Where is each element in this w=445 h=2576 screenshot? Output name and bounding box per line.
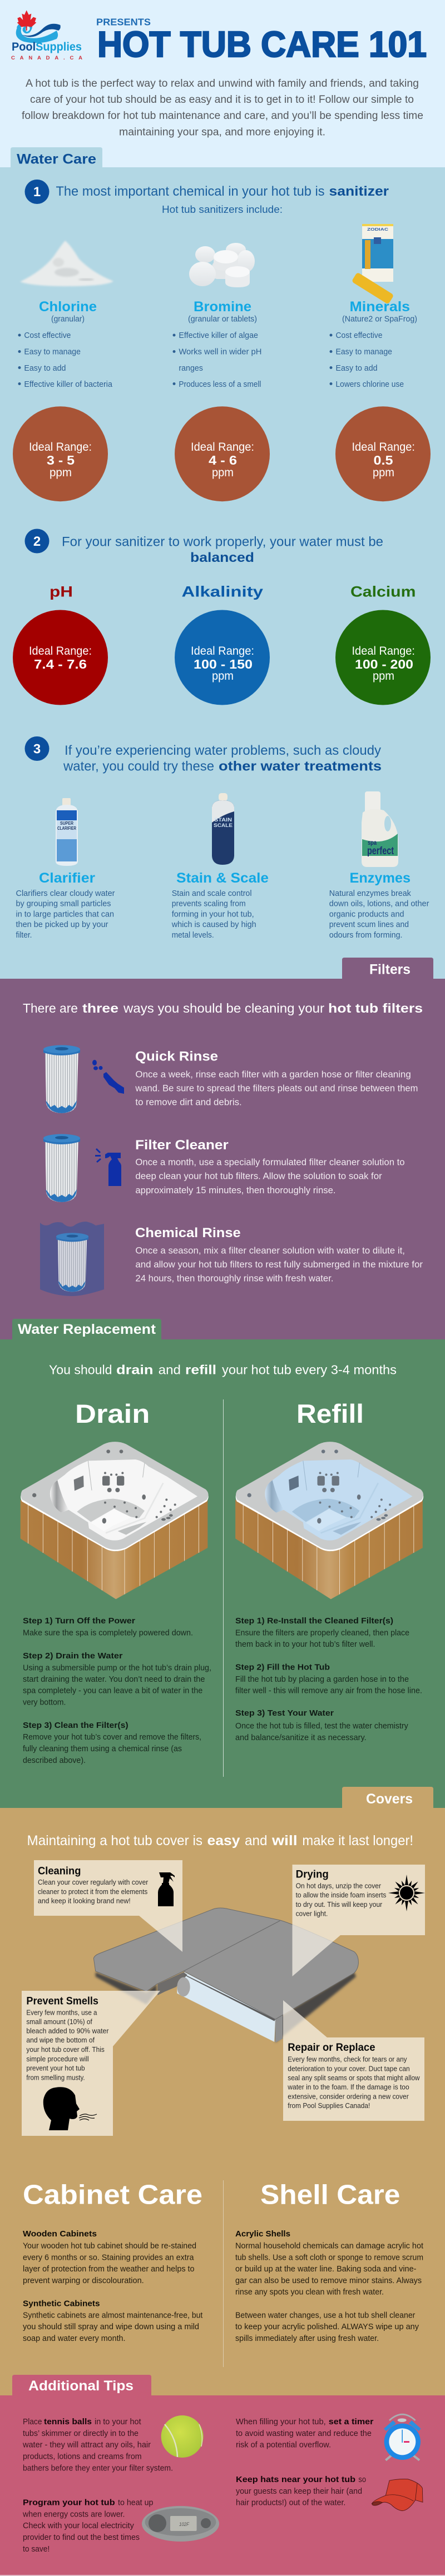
callout: drying: On hot days, unzip the cover bbox=[296, 1881, 382, 1890]
tip: keep hats: your guests can keep their hair (and bbox=[236, 2487, 362, 2496]
callout: drying: Drying bbox=[296, 1869, 329, 1880]
icon: minerals box and cartridge: ZODIAC bbox=[367, 228, 388, 232]
icon: spa control panel: 102F bbox=[179, 2522, 189, 2527]
intro text: A hot tub is the perfect way to relax and unwind with family and friends, and taking bbox=[26, 78, 419, 89]
water replacement heading: drain bbox=[116, 1363, 154, 1377]
range circle: bromine bbox=[175, 406, 270, 501]
refill heading: Refill bbox=[296, 1399, 364, 1428]
intro text: care of your hot tub should be as easy and it is to get in to it! Follow our simple to bbox=[30, 94, 414, 106]
shell care column: rinse any spots you clean with fresh water. bbox=[235, 2288, 384, 2297]
range circle: calcium: 100 - 200 bbox=[355, 657, 413, 671]
refill steps: them back in to your hot tub’s filter well. bbox=[235, 1640, 375, 1649]
tip: program your hot tub: when energy costs are lower. bbox=[22, 2509, 125, 2519]
tab: water replacement bbox=[12, 1319, 161, 1339]
tab: additional tips bbox=[12, 2375, 151, 2395]
step 2 badge: 2 bbox=[33, 534, 41, 549]
icon: minerals box and cartridge bbox=[352, 224, 394, 305]
range circle: alkalinity: Ideal Range: bbox=[191, 645, 254, 657]
sanitizer column: bromine: Bromine bbox=[194, 299, 251, 315]
drain steps: Step 1) Turn Off the Power bbox=[23, 1616, 135, 1626]
tip: set a timer: When filling your hot tub, bbox=[236, 2417, 326, 2426]
callout: drying bbox=[293, 1865, 425, 1976]
icon: red cap bbox=[372, 2479, 423, 2511]
panel: water care bbox=[0, 147, 445, 979]
icon: enzymes bottle bbox=[362, 791, 398, 867]
range circle: chlorine: Ideal Range: bbox=[29, 441, 92, 454]
sanitizers subheading: Hot tub sanitizers include: bbox=[162, 204, 283, 215]
icon: enzymes bottle: spa bbox=[368, 839, 377, 846]
tip: tennis balls: water - they will attract any oils, hair bbox=[22, 2440, 151, 2450]
sanitizer column: chlorine: Easy to manage bbox=[24, 348, 81, 357]
treatment column: clarifier bbox=[16, 870, 115, 940]
icon: black spray bottle bbox=[158, 1872, 175, 1906]
tip: program your hot tub: Check with your local electricity bbox=[23, 2521, 134, 2530]
water replacement heading: your hot tub every 3-4 months bbox=[222, 1363, 397, 1377]
chemical rinse text: 24 hours, then thoroughly rinse with fresh water. bbox=[135, 1273, 334, 1283]
callout: prevent smells: your hot tub cover off. This bbox=[26, 2045, 105, 2054]
refill steps bbox=[235, 1616, 422, 1742]
step 1 heading: The most important chemical in your hot tub is bbox=[56, 184, 325, 199]
treatment column: stain and scale: forming in your hot tub, bbox=[172, 910, 254, 919]
shell care column: to keep your acrylic polished. ALWAYS wipe up any bbox=[235, 2323, 419, 2331]
chemical rinse text: Chemical Rinse bbox=[135, 1225, 241, 1240]
range circle: minerals: 0.5 bbox=[374, 453, 393, 467]
sanitizer column: chlorine: Effective killer of bacteria bbox=[24, 380, 113, 389]
drain steps: fully cleaning them using a chemical rinse (as bbox=[23, 1745, 182, 1753]
filters heading: three bbox=[82, 1001, 118, 1015]
covers heading: Maintaining a hot tub cover is bbox=[27, 1833, 202, 1848]
icon: clarifier bottle: CLARIFIER bbox=[57, 826, 76, 831]
tip: keep hats bbox=[236, 2475, 366, 2508]
cabinet care column: layer of protection from the weather and helps to bbox=[23, 2265, 195, 2274]
range circle: pH bbox=[13, 610, 108, 705]
callout: prevent smells: Every few months, use a bbox=[26, 2009, 97, 2017]
panel: water replacement bbox=[0, 1319, 445, 1808]
tab: water care bbox=[11, 147, 102, 167]
shell care column: Between water changes, use a hot tub shell cleaner bbox=[235, 2311, 416, 2320]
sanitizer column: bromine: ranges bbox=[179, 364, 203, 373]
callout: repair or replace bbox=[283, 2000, 424, 2121]
shell care column bbox=[235, 2180, 423, 2343]
tip: set a timer: set a timer bbox=[329, 2417, 374, 2426]
callout: repair or replace: from Pool Supplies Canada! bbox=[288, 2101, 370, 2110]
icon: bromine tablets bbox=[189, 243, 255, 287]
tip: keep hats: so bbox=[358, 2475, 366, 2484]
drain steps: spa completely - you can leave a bit of water in the bbox=[23, 1687, 202, 1696]
sanitizer column: minerals: (Nature2 or SpaFrog) bbox=[342, 315, 417, 323]
callout: repair or replace: water in to the foam. If the damage is too bbox=[287, 2083, 409, 2091]
callout: drying: to allow the inside foam inserts bbox=[296, 1891, 387, 1899]
callout: repair or replace: Every few months, check for tears or any bbox=[288, 2055, 407, 2063]
treatment column: stain and scale: Stain and scale control bbox=[172, 889, 251, 898]
treatment column: clarifier: then be picked up by your bbox=[16, 920, 108, 929]
range circle: alkalinity: 100 - 150 bbox=[194, 657, 253, 671]
tip: program your hot tub: to heat up bbox=[118, 2498, 154, 2508]
sanitizer column: minerals: Easy to manage bbox=[336, 348, 392, 357]
treatment column: clarifier: by grouping small particles bbox=[16, 899, 111, 908]
tip: program your hot tub: Program your hot tub bbox=[23, 2498, 115, 2508]
callout: cleaning: cleaner to protect it from the elements bbox=[38, 1887, 148, 1896]
drain steps: described above). bbox=[23, 1756, 86, 1765]
filter cleaner text: deep clean your hot tub filters. Allow the solution to soak for bbox=[135, 1172, 382, 1182]
icon: chlorine powder pile bbox=[20, 241, 113, 286]
filters heading: ways you should be cleaning your bbox=[123, 1001, 324, 1015]
cabinet care column: Synthetic Cabinets bbox=[23, 2299, 100, 2309]
sanitizer column: minerals: Cost effective bbox=[336, 331, 383, 340]
step 3 heading: water, you could try these bbox=[63, 759, 214, 774]
treatment column: stain and scale: Stain & Scale bbox=[176, 870, 269, 886]
icon: alarm clock bbox=[384, 2414, 421, 2460]
step 3 badge: 3 bbox=[33, 741, 41, 757]
water replacement heading: refill bbox=[185, 1363, 216, 1377]
shell care column: Normal household chemicals can damage acrylic hot bbox=[235, 2242, 423, 2251]
water replacement heading bbox=[49, 1363, 397, 1377]
covers heading bbox=[27, 1833, 413, 1848]
refill steps: Step 3) Test Your Water bbox=[235, 1708, 334, 1718]
filter cleaner text bbox=[135, 1138, 405, 1195]
tip: tennis balls: tubs’ skimmer or directly in to the bbox=[23, 2429, 139, 2438]
drain steps: Using a submersible pump or the hot tub’s drain plug, bbox=[23, 1663, 211, 1672]
icon: hose nozzle bbox=[92, 1060, 124, 1094]
treatment column: stain and scale: prevents scaling from bbox=[172, 899, 246, 908]
illustration: filled hot tub bbox=[235, 1442, 423, 1599]
range circle: minerals bbox=[335, 406, 431, 501]
range circle: chlorine: ppm bbox=[50, 466, 72, 479]
cabinet care column: Cabinet Care bbox=[23, 2180, 202, 2210]
icon: sun bbox=[388, 1875, 425, 1911]
step 3 heading: If you’re experiencing water problems, such as cloudy bbox=[65, 743, 381, 758]
callout: drying: cover light. bbox=[296, 1910, 328, 1918]
sanitizer column: bromine: Works well in wider pH bbox=[179, 348, 261, 357]
logo: Pool Supplies Canada bbox=[11, 10, 82, 61]
step 2 heading bbox=[62, 535, 383, 565]
sanitizer column: minerals: Minerals bbox=[349, 299, 410, 315]
panel: additional tips bbox=[0, 2375, 445, 2576]
filters heading: hot tub filters bbox=[328, 1001, 423, 1015]
sanitizer column: bromine: Produces less of a smell bbox=[179, 380, 261, 389]
drain steps: Remove your hot tub’s cover and remove the filters, bbox=[23, 1733, 201, 1742]
refill steps: Once the hot tub is filled, test the water chemistry bbox=[235, 1722, 408, 1731]
shell care column: Acrylic Shells bbox=[235, 2229, 290, 2239]
covers heading: easy bbox=[207, 1833, 240, 1848]
range circle: pH: Ideal Range: bbox=[29, 645, 92, 657]
tip: program your hot tub: provider to find out the best times bbox=[23, 2533, 140, 2542]
range circle: chlorine bbox=[13, 406, 108, 501]
range circle: calcium: Ideal Range: bbox=[352, 645, 415, 657]
range circle: calcium bbox=[335, 610, 431, 705]
tip: tennis balls: tennis balls bbox=[44, 2417, 92, 2426]
page background: header bbox=[0, 0, 445, 167]
range circle: calcium: ppm bbox=[373, 670, 394, 682]
step 1 heading: sanitizer bbox=[329, 184, 389, 199]
sanitizer column: bromine bbox=[172, 299, 261, 389]
range circle: alkalinity: ppm bbox=[212, 670, 234, 682]
tab: covers bbox=[342, 1787, 433, 1808]
tip: set a timer bbox=[236, 2417, 374, 2450]
intro text: follow breakdown for hot tub maintenance and care, and you’ll be spending less time bbox=[22, 110, 423, 122]
step 2 badge bbox=[24, 529, 49, 554]
treatment column: clarifier: filter. bbox=[16, 931, 32, 940]
cabinet care column: every 6 months or so. Staining provides an extra bbox=[23, 2253, 194, 2262]
range circle: bromine: Ideal Range: bbox=[191, 441, 254, 454]
sanitizer column: bromine: (granular or tablets) bbox=[188, 315, 257, 323]
sanitizer column: minerals: Easy to add bbox=[336, 364, 377, 373]
sanitizer column: bromine: Effective killer of algae bbox=[179, 331, 258, 340]
callout: repair or replace: seal any split seams or spots that might allow bbox=[288, 2074, 420, 2082]
cabinet care column: prevent warping or discolouration. bbox=[23, 2276, 144, 2285]
presents label: PRESENTS bbox=[96, 17, 151, 28]
step 1 badge: 1 bbox=[33, 185, 41, 200]
icon: stain and scale bottle: SCALE bbox=[214, 823, 233, 828]
tab: additional tips: Additional Tips bbox=[28, 2378, 134, 2394]
refill steps: Ensure the filters are properly cleaned, then place bbox=[235, 1628, 409, 1637]
treatment column: clarifier: Clarifiers clear cloudy water bbox=[16, 889, 115, 898]
tab: water replacement: Water Replacement bbox=[18, 1322, 156, 1337]
sanitizer column: minerals: Lowers chlorine use bbox=[336, 380, 404, 389]
illustration: empty hot tub bbox=[21, 1442, 209, 1599]
icon: spa control panel bbox=[142, 2506, 219, 2542]
callout: cleaning: and keep it looking brand new! bbox=[38, 1897, 131, 1905]
water replacement heading: You should bbox=[49, 1363, 112, 1377]
tip: set a timer: risk of a potential overflow. bbox=[236, 2440, 331, 2450]
step 2 heading: balanced bbox=[190, 550, 254, 565]
quick rinse text: wand. Be sure to spread the filters pleats out and rinse between them bbox=[135, 1084, 418, 1094]
shell care column: tub shells. Use a soft cloth or sponge to remove scrum bbox=[235, 2253, 423, 2262]
quick rinse text: to remove dirt and debris. bbox=[135, 1097, 242, 1107]
refill steps: filter well - this will remove any air from the hose line. bbox=[235, 1687, 422, 1696]
chemical rinse text bbox=[135, 1225, 423, 1283]
treatment column: enzymes: down oils, lotions, and other bbox=[329, 899, 429, 908]
callout: repair or replace: Repair or Replace bbox=[288, 2042, 375, 2054]
callout: prevent smells: simple procedure will bbox=[26, 2055, 89, 2063]
quick rinse text: Once a week, rinse each filter with a garden hose or filter cleaning bbox=[135, 1069, 411, 1079]
panel: filters bbox=[0, 958, 445, 1339]
panel: covers bbox=[0, 1787, 445, 2395]
callout: cleaning: Clean your cover regularly with cover bbox=[38, 1878, 149, 1886]
quick rinse text: Quick Rinse bbox=[135, 1049, 218, 1064]
step 2 heading: For your sanitizer to work properly, your water must be bbox=[62, 535, 383, 549]
drain steps: start draining the water. You don’t need to drain the bbox=[23, 1675, 205, 1684]
range circle: bromine: ppm bbox=[212, 466, 234, 479]
title: HOT TUB CARE 101 bbox=[97, 24, 427, 64]
callout: drying: to dry out. This will keep your bbox=[296, 1900, 383, 1909]
callout: prevent smells: bleach added to 90% water bbox=[26, 2026, 109, 2035]
drain steps: Step 3) Clean the Filter(s) bbox=[23, 1721, 128, 1730]
treatment column: enzymes: prevent scum lines and bbox=[329, 920, 409, 929]
treatment column: enzymes: organic products and bbox=[329, 910, 404, 919]
callout: repair or replace: extensive, consider ordering a new cover bbox=[288, 2092, 409, 2100]
sanitizer column: chlorine: (granular) bbox=[51, 315, 85, 323]
drain heading: Drain bbox=[75, 1399, 150, 1428]
filters heading bbox=[23, 1001, 423, 1015]
treatment column: clarifier: in to large particles that can bbox=[16, 910, 114, 919]
treatment column: stain and scale: which is caused by high bbox=[171, 920, 256, 929]
icon: spray bottle bbox=[95, 1148, 121, 1186]
quick rinse text bbox=[135, 1049, 418, 1107]
range circle: minerals: Ideal Range: bbox=[352, 441, 415, 454]
tip: keep hats: Keep hats near your hot tub bbox=[236, 2475, 355, 2484]
callout: cleaning bbox=[34, 1860, 182, 1952]
icon: stain and scale bottle bbox=[212, 793, 234, 865]
range circle: alkalinity bbox=[175, 610, 270, 705]
tip: keep hats: hair products!) out of the water. bbox=[236, 2498, 345, 2508]
covers heading: make it last longer! bbox=[302, 1833, 413, 1848]
icon: stain and scale bottle: STAIN bbox=[214, 817, 232, 823]
icon: filter cartridge 2 bbox=[43, 1134, 80, 1202]
covers heading: will bbox=[271, 1833, 298, 1848]
range circle: pH: 7.4 - 7.6 bbox=[34, 657, 87, 671]
tip: tennis balls: in to your hot bbox=[95, 2417, 141, 2426]
tip: program your hot tub bbox=[22, 2498, 153, 2554]
filter cleaner text: approximately 15 minutes, then thoroughly rinse. bbox=[135, 1185, 336, 1195]
cabinet care column bbox=[23, 2180, 202, 2343]
treatment column: enzymes: odours from forming. bbox=[329, 931, 403, 940]
covers heading: and bbox=[245, 1833, 268, 1848]
treatment column: stain and scale bbox=[171, 870, 269, 940]
callout: cleaning: Cleaning bbox=[38, 1865, 81, 1877]
filters heading: There are bbox=[23, 1001, 78, 1015]
tab: water care: Water Care bbox=[17, 151, 96, 167]
callout: prevent smells: Prevent Smells bbox=[26, 1995, 98, 2007]
treatment column: enzymes bbox=[329, 870, 429, 940]
callout: prevent smells: small amount (10%) of bbox=[26, 2017, 92, 2026]
sanitizer column: chlorine: Chlorine bbox=[39, 299, 97, 315]
step 3 badge bbox=[24, 736, 49, 761]
tip: tennis balls: products, lotions and creams from bbox=[23, 2452, 142, 2461]
chemical rinse text: and allow your hot tub filters to rest fully submerged in the mixture for bbox=[135, 1259, 423, 1269]
shell care column: or build up at the water line. Baking soda and vine- bbox=[235, 2265, 417, 2274]
tip: tennis balls bbox=[22, 2417, 173, 2473]
step 3 heading bbox=[63, 743, 382, 774]
treatment column: clarifier: Clarifier bbox=[39, 870, 95, 886]
icon: enzymes bottle: perfect bbox=[367, 845, 394, 857]
icon: clarifier bottle bbox=[56, 798, 78, 866]
filter cleaner text: Filter Cleaner bbox=[135, 1138, 229, 1153]
intro text bbox=[22, 78, 423, 138]
refill steps: Step 2) Fill the Hot Tub bbox=[235, 1662, 330, 1672]
cabinet care column: Wooden Cabinets bbox=[23, 2229, 97, 2239]
balance heading: pH: pH bbox=[50, 584, 73, 600]
icon: filter cartridge 1 bbox=[43, 1045, 80, 1113]
sanitizer column: minerals bbox=[329, 299, 417, 389]
cabinet care column: soap and water every month. bbox=[23, 2334, 126, 2343]
range circle: chlorine: 3 - 5 bbox=[47, 453, 75, 467]
intro text: maintaining your spa, and more enjoying it. bbox=[119, 127, 325, 138]
icon: clarifier bottle: SUPER bbox=[60, 821, 73, 826]
chemical rinse text: Once a season, mix a filter cleaner solution with water to dilute it, bbox=[135, 1245, 405, 1255]
water replacement heading: and bbox=[159, 1363, 181, 1377]
callout: prevent smells: and wipe the bottom of bbox=[26, 2036, 95, 2044]
tab: filters bbox=[342, 958, 433, 979]
logo: Pool Supplies Canada: CANADA.CA bbox=[11, 55, 82, 61]
treatment column: enzymes: Enzymes bbox=[349, 870, 411, 886]
refill steps: Step 1) Re-Install the Cleaned Filter(s) bbox=[235, 1616, 393, 1626]
refill steps: and balance/sanitize it as necessary. bbox=[235, 1733, 367, 1742]
shell care column: Shell Care bbox=[260, 2180, 400, 2210]
sanitizer column: chlorine: Easy to add bbox=[24, 364, 66, 373]
balance heading: calcium: Calcium bbox=[350, 584, 416, 600]
filter cleaner text: Once a month, use a specially formulated filter cleaner solution to bbox=[135, 1157, 405, 1167]
icon: tennis ball bbox=[161, 2415, 204, 2458]
treatment column: enzymes: Natural enzymes break bbox=[329, 889, 412, 898]
drain steps bbox=[23, 1616, 211, 1765]
shell care column: spills immediately after using fresh water. bbox=[235, 2334, 379, 2343]
illustration: hot tub cover bbox=[93, 1908, 358, 2042]
cabinet care column: Your wooden hot tub cabinet should be re-stained bbox=[23, 2242, 196, 2251]
range circle: minerals: ppm bbox=[373, 466, 394, 479]
cabinet care column: Synthetic cabinets are almost maintenance-free, but bbox=[23, 2311, 202, 2320]
icon: filter soaking in tank bbox=[40, 1219, 104, 1296]
shell care column: gar can also be used to remove minor stains. Always bbox=[235, 2276, 422, 2285]
sanitizer column: chlorine: Cost effective bbox=[24, 331, 71, 340]
tip: set a timer: to avoid wasting water and reduce the bbox=[236, 2429, 372, 2438]
sanitizer column: chlorine bbox=[18, 299, 113, 389]
icon: head breathing bbox=[43, 2087, 97, 2130]
tip: tennis balls: bathers before they enter your filter system. bbox=[23, 2463, 173, 2473]
drain steps: Step 2) Drain the Water bbox=[23, 1651, 123, 1661]
refill steps: Fill the hot tub by placing a garden hose in to the bbox=[235, 1675, 409, 1684]
treatment column: stain and scale: metal levels. bbox=[172, 931, 214, 940]
tip: program your hot tub: to save! bbox=[23, 2544, 50, 2554]
tip: tennis balls: Place bbox=[23, 2417, 42, 2426]
cabinet care column: you should still spray and wipe down using a mild bbox=[23, 2323, 199, 2331]
callout: prevent smells: from smelling musty. bbox=[26, 2074, 85, 2082]
tab: covers: Covers bbox=[366, 1791, 413, 1807]
callout: repair or replace: deterioration to your cover. Duct tape can bbox=[288, 2065, 410, 2073]
step 3 heading: other water treatments bbox=[219, 759, 382, 774]
callout: prevent smells: prevent your hot tub bbox=[26, 2064, 85, 2072]
logo: Pool Supplies Canada: PoolSupplies bbox=[12, 41, 82, 53]
callout: prevent smells bbox=[22, 1991, 160, 2136]
range circle: bromine: 4 - 6 bbox=[209, 453, 237, 467]
tab: filters: Filters bbox=[369, 961, 411, 977]
drain steps: Make sure the spa is completely powered down. bbox=[23, 1628, 193, 1637]
balance heading: alkalinity: Alkalinity bbox=[181, 584, 263, 600]
step 1 badge bbox=[24, 180, 49, 204]
drain steps: very bottom. bbox=[23, 1698, 66, 1707]
